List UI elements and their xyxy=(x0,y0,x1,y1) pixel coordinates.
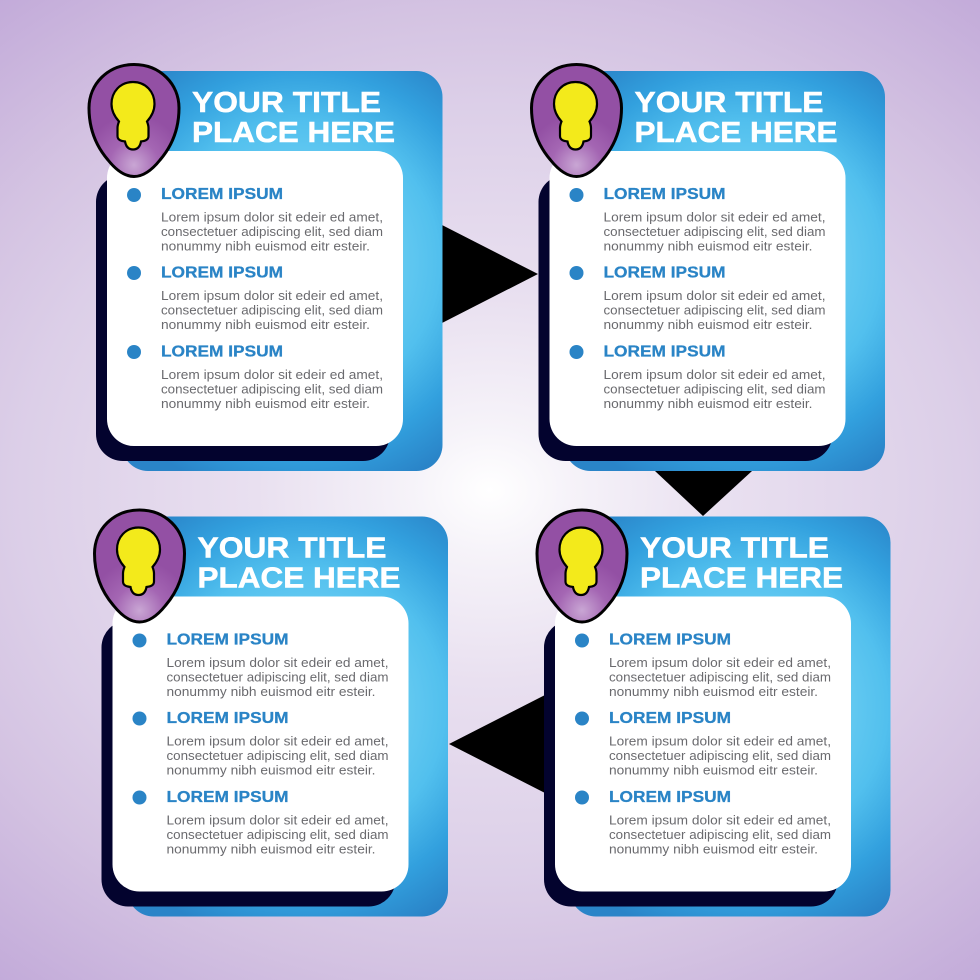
list item 2: nonummy nibh euismod eitr esteir. xyxy=(609,762,818,778)
heading: title xyxy=(634,87,838,149)
heading: title xyxy=(198,532,400,594)
list item 2: LOREM IPSUM xyxy=(166,710,288,727)
panel: card 1 xyxy=(89,64,442,471)
list item 1: nonummy nibh euismod eitr esteir. xyxy=(161,238,370,254)
icon: bulb pin xyxy=(94,510,184,622)
arrow: right xyxy=(442,225,538,323)
list item 1: Lorem ipsum dolor sit edeir ed amet, xyxy=(166,655,388,670)
list item 3: LOREM IPSUM xyxy=(604,344,726,360)
list item 1: nonummy nibh euismod eitr esteir. xyxy=(609,684,818,699)
panel: card 3 xyxy=(94,510,448,916)
list item 3: Lorem ipsum dolor sit edeir ed amet, xyxy=(161,367,383,382)
list item 1: consectetuer adipiscing elit, sed diam xyxy=(166,670,388,684)
list item 1: consectetuer adipiscing elit, sed diam xyxy=(604,224,826,239)
heading: title: YOUR TITLE xyxy=(640,532,829,564)
list item 3: LOREM IPSUM xyxy=(166,789,288,806)
arrow: down xyxy=(655,471,752,516)
heading: title: PLACE HERE xyxy=(192,117,395,149)
list item 1: Lorem ipsum dolor sit edeir ed amet, xyxy=(161,210,383,224)
heading: title: YOUR TITLE xyxy=(192,87,381,119)
list item 1: consectetuer adipiscing elit, sed diam xyxy=(161,224,383,239)
list item 1 xyxy=(132,632,388,699)
heading: title: PLACE HERE xyxy=(634,117,838,149)
list item 2 xyxy=(127,264,383,332)
list item 3 xyxy=(575,789,831,856)
heading: title: PLACE HERE xyxy=(640,562,843,594)
icon: bulb pin xyxy=(537,510,627,622)
list item 3: LOREM IPSUM xyxy=(609,789,731,806)
heading: title: YOUR TITLE xyxy=(634,87,824,119)
list item 3 xyxy=(570,344,826,411)
heading: title: YOUR TITLE xyxy=(198,532,386,564)
list item 3: consectetuer adipiscing elit, sed diam xyxy=(604,382,826,396)
list item 1: consectetuer adipiscing elit, sed diam xyxy=(609,670,831,684)
heading: title xyxy=(640,532,843,594)
list item 2: LOREM IPSUM xyxy=(161,264,283,282)
list item 1: Lorem ipsum dolor sit edeir ed amet, xyxy=(609,655,831,670)
heading: title: PLACE HERE xyxy=(198,562,400,594)
list item 1: LOREM IPSUM xyxy=(609,632,731,648)
list item 2: nonummy nibh euismod eitr esteir. xyxy=(166,762,376,778)
list item 3: consectetuer adipiscing elit, sed diam xyxy=(161,382,383,396)
list item 2: nonummy nibh euismod eitr esteir. xyxy=(604,317,812,332)
list item 3: Lorem ipsum dolor sit edeir ed amet, xyxy=(609,812,831,828)
list item 1: Lorem ipsum dolor sit edeir ed amet, xyxy=(604,210,826,224)
list item 3 xyxy=(132,789,388,856)
list item 3: Lorem ipsum dolor sit edeir ed amet, xyxy=(604,367,826,382)
list item 3: nonummy nibh euismod eitr esteir. xyxy=(161,396,370,411)
list item 3: nonummy nibh euismod eitr esteir. xyxy=(604,396,812,411)
list item 2: nonummy nibh euismod eitr esteir. xyxy=(161,317,370,332)
list item 2: LOREM IPSUM xyxy=(604,264,726,282)
list item 3: nonummy nibh euismod eitr esteir. xyxy=(609,842,818,856)
list item 1 xyxy=(575,632,831,699)
panel: card 2 xyxy=(532,64,885,471)
list item 2: consectetuer adipiscing elit, sed diam xyxy=(609,748,831,763)
list item 2: Lorem ipsum dolor sit edeir ed amet, xyxy=(609,734,831,748)
list item 1: nonummy nibh euismod eitr esteir. xyxy=(166,684,376,699)
heading: title xyxy=(192,87,395,149)
icon: bulb pin xyxy=(89,64,179,176)
list item 1: LOREM IPSUM xyxy=(604,186,726,203)
list item 2: LOREM IPSUM xyxy=(609,710,731,727)
list item 1 xyxy=(570,186,826,254)
list item 2: consectetuer adipiscing elit, sed diam xyxy=(604,302,826,318)
list item 2 xyxy=(575,710,831,778)
icon: bulb pin xyxy=(532,64,622,176)
list item 2: Lorem ipsum dolor sit edeir ed amet, xyxy=(604,288,826,303)
list item 3 xyxy=(127,344,383,411)
list item 2: Lorem ipsum dolor sit edeir ed amet, xyxy=(161,288,383,303)
list item 1: LOREM IPSUM xyxy=(161,186,283,203)
list item 3: LOREM IPSUM xyxy=(161,344,283,360)
list item 2: consectetuer adipiscing elit, sed diam xyxy=(161,302,383,318)
list item 2: consectetuer adipiscing elit, sed diam xyxy=(166,748,388,763)
list item 1: LOREM IPSUM xyxy=(166,632,288,648)
arrow: left xyxy=(449,695,545,793)
list item 2 xyxy=(132,710,388,778)
list item 3: consectetuer adipiscing elit, sed diam xyxy=(609,827,831,842)
list item 3: consectetuer adipiscing elit, sed diam xyxy=(166,827,388,842)
list item 1: nonummy nibh euismod eitr esteir. xyxy=(604,238,812,254)
list item 2: Lorem ipsum dolor sit edeir ed amet, xyxy=(166,734,388,748)
list item 3: Lorem ipsum dolor sit edeir ed amet, xyxy=(166,812,388,828)
panel: card 4 xyxy=(537,510,890,916)
list item 2 xyxy=(570,264,826,332)
list item 1 xyxy=(127,186,383,254)
list item 3: nonummy nibh euismod eitr esteir. xyxy=(166,842,376,856)
